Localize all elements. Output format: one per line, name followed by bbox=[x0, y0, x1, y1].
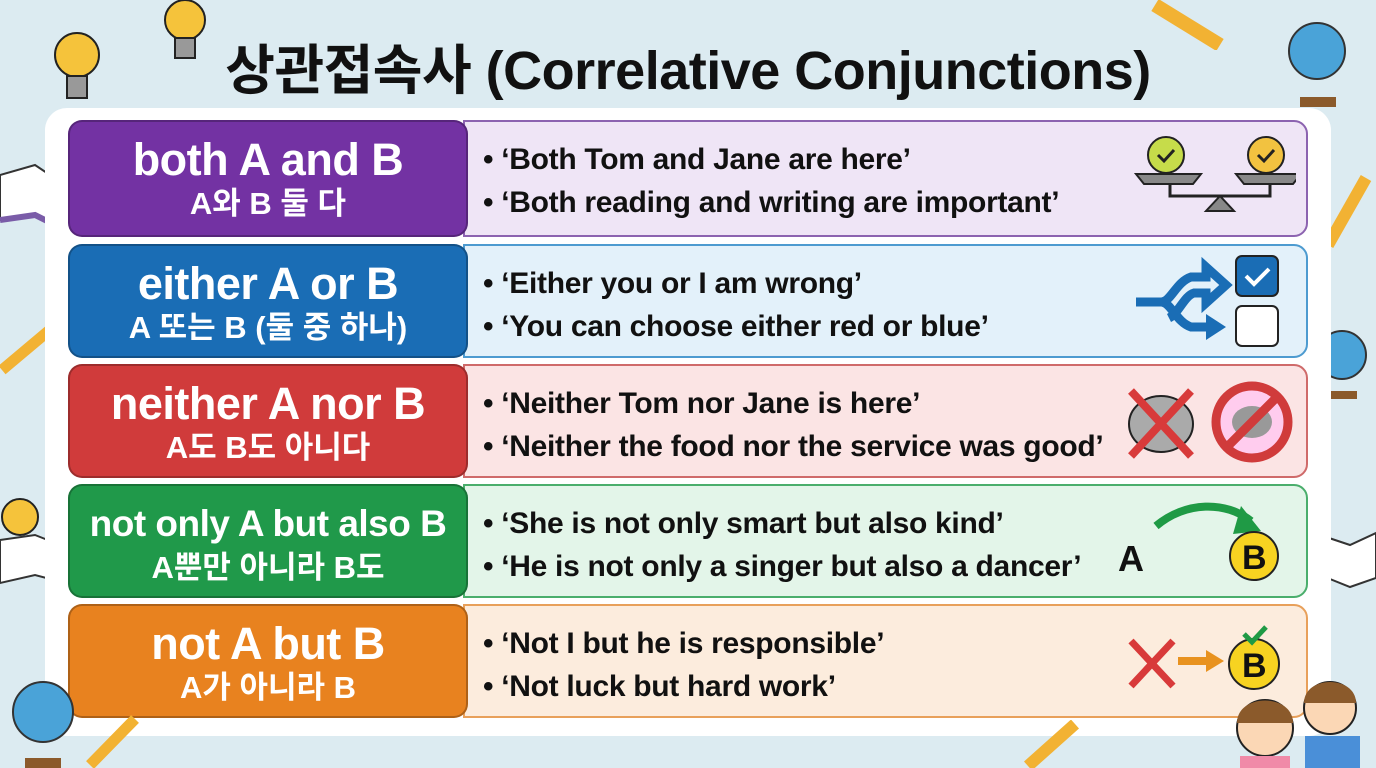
row: both A and B: both A and B bbox=[133, 134, 403, 185]
row: either A or B: A 또는 B (둘 중 하나) bbox=[129, 310, 407, 345]
row: neither A nor B: neither A nor B bbox=[111, 378, 425, 429]
decoration: bulb and book left bbox=[0, 498, 45, 584]
icon: split arrow with checkboxes bbox=[1136, 255, 1279, 347]
panel: white card bbox=[45, 108, 1331, 736]
row: either A or B: • ‘You can choose either red or blue’ bbox=[483, 310, 989, 343]
icon: A arrow to B: B bbox=[1242, 539, 1267, 577]
row: both A and B: A와 B 둘 다 bbox=[190, 186, 346, 221]
row: not A but B bbox=[68, 604, 1308, 718]
decoration: globe right bbox=[1331, 330, 1367, 399]
row: both A and B: • ‘Both Tom and Jane are here’ bbox=[483, 143, 911, 176]
decoration: book left bbox=[0, 164, 45, 224]
icon: crossed and banned circles bbox=[1128, 382, 1292, 462]
row: not A but B: not A but B bbox=[151, 618, 385, 669]
row: either A or B: • ‘Either you or I am wrong’ bbox=[483, 267, 862, 300]
decoration: book right bbox=[1331, 532, 1376, 588]
row: not only A but also B: A뿐만 아니라 B도 bbox=[151, 550, 385, 585]
decoration: pencil bottom bbox=[1024, 720, 1079, 768]
row: both A and B bbox=[68, 120, 1308, 237]
title: 상관접속사 (Correlative Conjunctions) bbox=[225, 41, 1151, 101]
decoration: pencil right bbox=[1331, 175, 1372, 248]
decoration: kids bottom right bbox=[1236, 681, 1360, 768]
row: either A or B bbox=[68, 244, 1308, 358]
icon: balance scale bbox=[1134, 136, 1296, 212]
row: either A or B: either A or B bbox=[138, 258, 398, 309]
icon: X arrow to B bbox=[1128, 625, 1280, 690]
row: not A but B: A가 아니라 B bbox=[180, 670, 356, 705]
row: neither A nor B: • ‘Neither the food nor the service was good’ bbox=[483, 430, 1103, 463]
row: not only A but also B: not only A but also B bbox=[90, 503, 446, 544]
decoration: pencil bottom left bbox=[86, 715, 139, 768]
decoration: pencil left bbox=[0, 326, 45, 374]
row: not only A but also B: • ‘He is not only a singer but also a dancer’ bbox=[483, 550, 1081, 583]
row: both A and B: • ‘Both reading and writing are important’ bbox=[483, 186, 1059, 219]
row: neither A nor B bbox=[68, 364, 1308, 478]
decoration: globe bottom left bbox=[12, 681, 74, 768]
decoration: pencil top right bbox=[1151, 0, 1224, 50]
icon: A arrow to B bbox=[1118, 502, 1279, 581]
row: not only A but also B bbox=[68, 484, 1308, 598]
row: not only A but also B: • ‘She is not only smart but also kind’ bbox=[483, 507, 1004, 540]
row: neither A nor B: A도 B도 아니다 bbox=[166, 430, 370, 465]
row: not A but B: • ‘Not I but he is responsible’ bbox=[483, 627, 884, 660]
icon: A arrow to B: A bbox=[1118, 538, 1144, 579]
icon: X arrow to B: B bbox=[1242, 647, 1267, 685]
decoration: lightbulbs bbox=[54, 0, 206, 99]
row: neither A nor B: • ‘Neither Tom nor Jane is here’ bbox=[483, 387, 920, 420]
row: not A but B: • ‘Not luck but hard work’ bbox=[483, 670, 836, 703]
decoration: globe top right bbox=[1288, 22, 1346, 107]
